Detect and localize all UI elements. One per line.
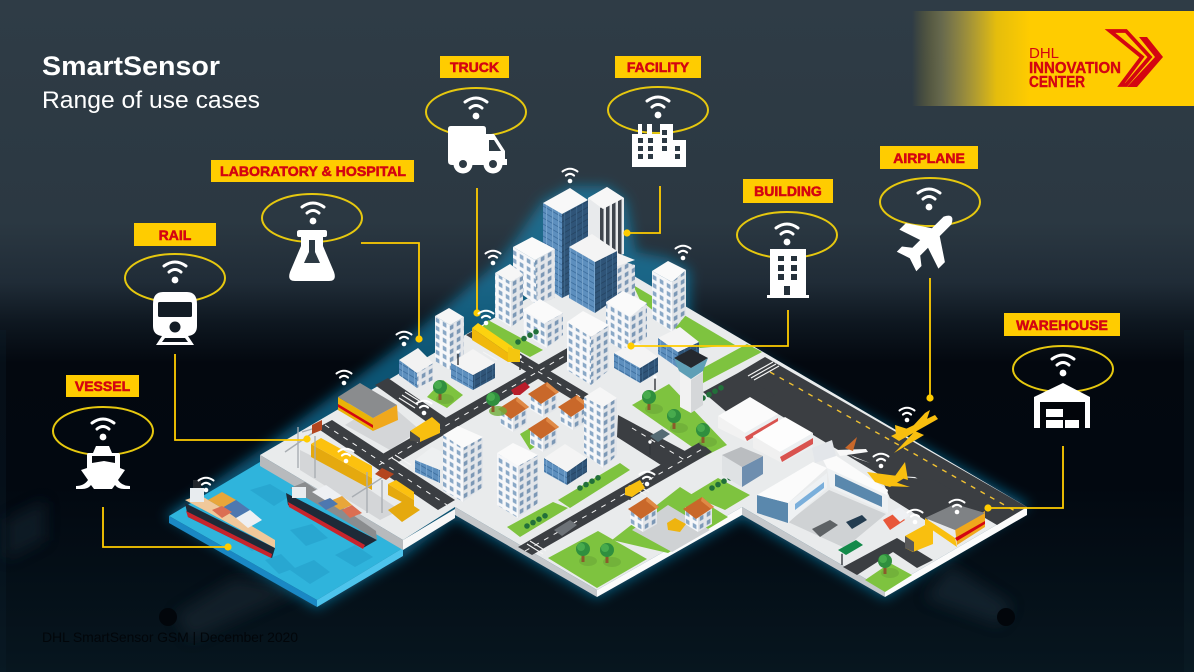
inner paved lot — [632, 505, 710, 552]
logo banner: CENTER — [1029, 74, 1085, 91]
runway centre line — [770, 372, 1015, 511]
crosswalks — [392, 352, 779, 554]
roads — [317, 328, 1027, 575]
small map wifi markers — [199, 169, 964, 524]
hangars — [718, 397, 813, 463]
front tall buildings — [443, 387, 617, 518]
icon: ship — [76, 446, 130, 489]
connector end dots — [224, 229, 992, 551]
title: SmartSensor — [42, 51, 221, 81]
use case: facility — [608, 56, 708, 167]
ship one — [185, 480, 275, 558]
facility sensor ring — [608, 87, 708, 133]
logo banner: INNOVATION — [1029, 60, 1121, 77]
rail sensor ring — [125, 254, 225, 302]
title: Range of use cases — [42, 87, 260, 114]
parked aircraft and cargo — [836, 410, 938, 530]
vessel sensor ring — [53, 407, 153, 455]
crane and train — [285, 420, 420, 522]
use case: truck — [426, 56, 526, 174]
footer note: DHL SmartSensor GSM | December 2020 — [42, 629, 298, 645]
ship two — [286, 482, 377, 549]
wifi icon — [918, 189, 940, 210]
airplane sensor ring — [880, 178, 980, 226]
tall buildings — [435, 187, 686, 385]
icon: factory — [632, 124, 686, 167]
use case: laboratory and hospital — [211, 160, 414, 281]
vessel label: VESSEL — [75, 378, 131, 394]
icon: office building — [767, 249, 809, 298]
warehouse label: WAREHOUSE — [1016, 317, 1108, 333]
trucks and cars — [410, 323, 933, 555]
icon: train — [153, 292, 197, 345]
truck sensor ring — [426, 88, 526, 136]
facility label: FACILITY — [627, 59, 690, 75]
use case: airplane — [880, 146, 980, 281]
building label: BUILDING — [754, 183, 822, 199]
low buildings — [399, 327, 699, 485]
logo banner: DHL — [1029, 45, 1059, 62]
wifi icon — [302, 203, 324, 224]
connector lines — [103, 186, 1063, 547]
truck label: TRUCK — [450, 59, 499, 75]
icon: warehouse — [1034, 383, 1090, 428]
icon: airplane — [887, 197, 971, 281]
houses — [498, 382, 714, 532]
wifi icon — [465, 98, 487, 119]
title — [42, 51, 260, 114]
platform glow — [165, 186, 1030, 609]
laboratory sensor ring — [262, 194, 362, 242]
wifi icon — [647, 97, 669, 118]
use case: vessel — [53, 375, 153, 489]
isometric city map — [165, 186, 1030, 609]
ground — [260, 256, 1027, 597]
airplane label: AIRPLANE — [893, 150, 965, 166]
icon: flask — [289, 230, 335, 281]
airport warehouse — [925, 504, 985, 547]
wifi icon — [92, 419, 114, 440]
control tower — [674, 349, 708, 413]
building sensor ring — [737, 212, 837, 258]
wifi icon — [164, 262, 186, 283]
road markings — [325, 332, 706, 551]
icon: truck — [448, 126, 507, 174]
logo banner — [912, 11, 1194, 106]
water — [169, 462, 403, 607]
use case: rail — [125, 223, 225, 345]
wifi icon — [1052, 355, 1074, 376]
airport terminal — [757, 440, 888, 548]
use case: warehouse — [1004, 313, 1120, 428]
laboratory label: LABORATORY & HOSPITAL — [220, 163, 406, 179]
green lawns — [427, 285, 912, 592]
laboratory label — [211, 160, 414, 182]
rail label: RAIL — [159, 227, 192, 243]
port warehouse — [338, 383, 398, 431]
warehouse sensor ring — [1013, 346, 1113, 392]
trees and bushes — [433, 329, 899, 578]
office block — [722, 447, 763, 487]
wifi icon — [776, 224, 798, 245]
use case: building — [737, 179, 837, 298]
